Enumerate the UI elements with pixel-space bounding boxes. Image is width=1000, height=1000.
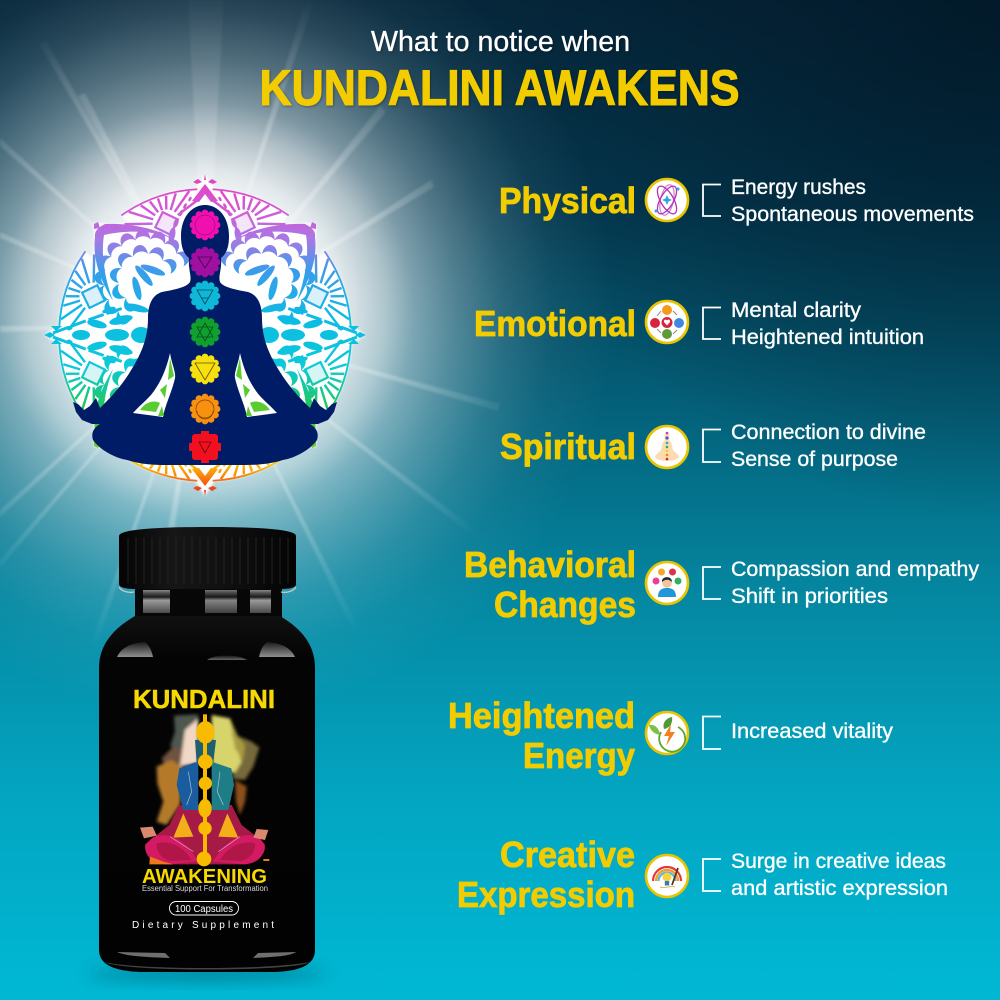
label: dietary supplement: Dietary Supplement: [132, 920, 274, 931]
heading: Spiritual: [500, 426, 636, 467]
icon: rainbow bulb: [646, 855, 688, 897]
point: Energy rushes: [731, 175, 866, 199]
heading: [464, 544, 636, 625]
point: Surge in creative ideas: [731, 849, 946, 873]
bracket: [703, 859, 721, 891]
heading: Creative: [500, 834, 635, 875]
bottle shadow: [87, 968, 327, 980]
label: tagline: Essential Support For Transformation: [142, 884, 268, 893]
heading: Emotional: [474, 303, 636, 344]
third eye chakra: [190, 247, 220, 277]
point: Spontaneous movements: [731, 202, 974, 226]
heading: Changes: [494, 584, 636, 625]
details: [731, 557, 979, 608]
details: [731, 849, 948, 900]
icon: leaf and lightning: [646, 712, 688, 754]
point: Sense of purpose: [731, 447, 898, 471]
meditating figure silhouette: [73, 205, 337, 465]
splatter: [149, 857, 269, 864]
row: Creative Expression: [457, 834, 948, 915]
heading: Expression: [457, 874, 635, 915]
bracket: [703, 716, 721, 749]
figure hands: [140, 827, 268, 840]
bottle body: [99, 616, 315, 972]
row: Behavioral Changes: [464, 544, 979, 625]
figure hip yellow: [173, 813, 238, 838]
mandala: [44, 174, 366, 496]
throat chakra: [190, 281, 220, 311]
point: Mental clarity: [731, 298, 861, 322]
bracket: [703, 184, 721, 216]
label: awakening: AWAKENING: [142, 865, 267, 888]
heading: [448, 695, 635, 776]
mandala coloured pattern: [44, 174, 366, 496]
row: Emotional: [474, 298, 924, 349]
title: [260, 26, 740, 116]
bracket: [703, 308, 721, 339]
chakras: [190, 210, 220, 461]
bracket: [703, 430, 721, 462]
sacral chakra: [190, 394, 220, 424]
icon: chakra meditator: [646, 426, 688, 468]
figure head: [195, 740, 216, 762]
point: Increased vitality: [731, 719, 893, 743]
row: Heightened Energy: [448, 695, 893, 776]
mandala white base: [44, 174, 366, 496]
row: Spiritual: [500, 420, 926, 471]
title line 2: KUNDALINI AWAKENS: [260, 60, 740, 116]
supplement bottle: [99, 527, 315, 972]
details: [731, 175, 974, 226]
heart chakra: [190, 317, 220, 347]
solar plexus chakra: [190, 354, 220, 384]
point: Shift in priorities: [731, 584, 888, 608]
icon: person with priorities: [646, 562, 688, 604]
label: brand name: KUNDALINI: [133, 684, 275, 714]
bottle neck: [135, 586, 282, 620]
heading: [457, 834, 635, 915]
shoulder highlights: [117, 642, 295, 660]
bottle cap: [119, 527, 296, 592]
heading: Heightened: [448, 695, 635, 736]
label: capsule count: 100 Capsules: [175, 904, 233, 915]
base highlights: [105, 952, 310, 970]
label: chakra artwork: [140, 714, 269, 866]
title line 1: What to notice when: [371, 26, 630, 58]
gap between left arm and torso: [133, 353, 175, 417]
details: [731, 298, 924, 349]
figure leg shade: [157, 842, 255, 861]
row: Physical: [499, 175, 974, 226]
point: Heightened intuition: [731, 325, 924, 349]
point: and artistic expression: [731, 876, 948, 900]
icon: emotions cycle: [646, 301, 688, 343]
icon: atom: [646, 179, 688, 221]
figure legs: [145, 835, 265, 864]
heading: Physical: [499, 180, 636, 221]
point: Compassion and empathy: [731, 557, 979, 581]
smoke clouds: [157, 714, 259, 825]
figure torso left: [177, 762, 198, 810]
point: Connection to divine: [731, 420, 926, 444]
light rays: [0, 0, 500, 652]
gap between right arm and torso: [235, 353, 277, 417]
heading: Behavioral: [464, 544, 636, 585]
root chakra: [191, 433, 219, 461]
figure torso right: [212, 762, 234, 810]
figure base: [145, 805, 264, 864]
figure veins: [170, 772, 240, 852]
crown chakra: [190, 210, 220, 240]
heading: Energy: [523, 735, 635, 776]
bracket: [703, 567, 721, 599]
spine energy: [196, 714, 214, 866]
details: [731, 420, 926, 471]
